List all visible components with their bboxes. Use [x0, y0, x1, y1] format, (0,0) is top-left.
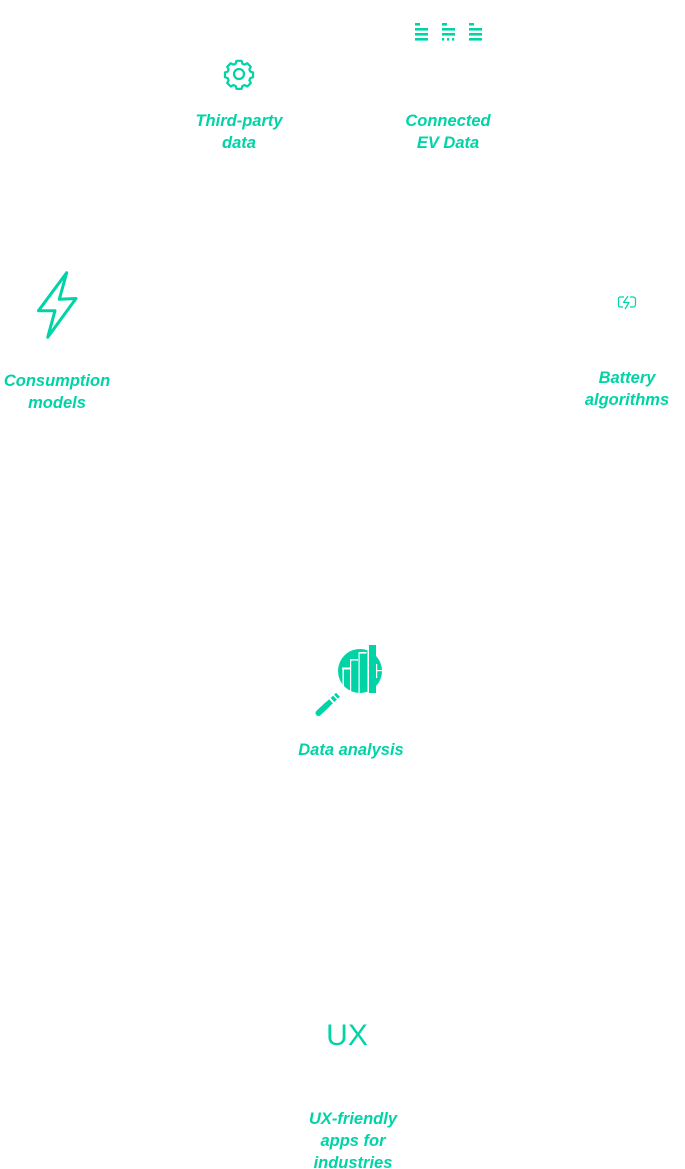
- label: Consumption models: [4, 372, 110, 412]
- label: Battery algorithms: Battery: [599, 369, 655, 387]
- label: Connected EV Data: [405, 112, 491, 152]
- label: Consumption models: models: [28, 394, 86, 412]
- icon: lightning bolt: [38, 273, 76, 337]
- label: UX-friendly apps for industries: UX-friendly: [309, 1110, 397, 1128]
- icon: battery charging: [618, 296, 636, 309]
- icon: data analysis magnifier: [318, 645, 382, 713]
- icon: UX: UX: [326, 1019, 368, 1052]
- label: Data analysis: Data analysis: [298, 741, 404, 759]
- label: Consumption models: Consumption: [4, 372, 110, 390]
- label: Connected EV Data: EV Data: [417, 134, 479, 152]
- label: Connected EV Data: Connected: [405, 112, 491, 130]
- label: UX-friendly apps for industries: [309, 1110, 398, 1169]
- label: Battery algorithms: [584, 369, 669, 409]
- label: UX-friendly apps for industries: apps for: [320, 1132, 386, 1150]
- label: Battery algorithms: algorithms: [585, 391, 669, 409]
- label: Third-party data: [195, 112, 284, 152]
- label: Third-party data: data: [222, 134, 256, 152]
- label: Third-party data: Third-party: [195, 112, 283, 130]
- icon: connected EV data bars: [415, 23, 482, 41]
- icon: gear: [225, 61, 253, 89]
